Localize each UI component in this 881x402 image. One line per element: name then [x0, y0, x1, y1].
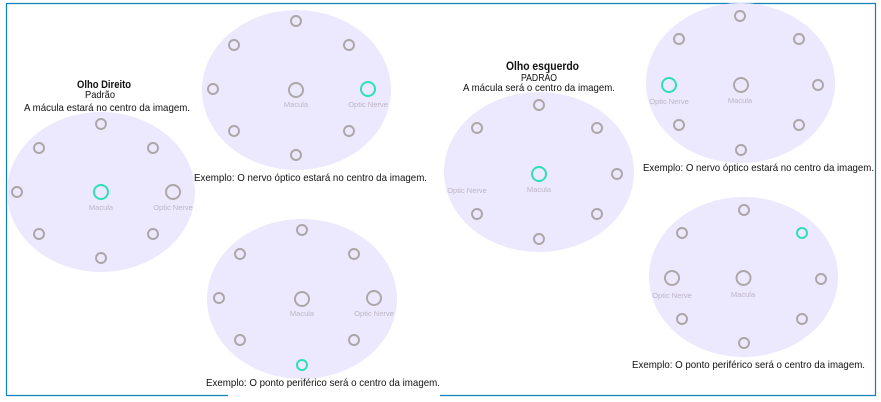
panel: right eye standard: [7, 79, 195, 272]
left eye optic nerve fundus diagram: [646, 3, 835, 163]
panel: left eye standard: [444, 59, 634, 252]
right eye peripheral fundus diagram: Macula: [290, 309, 315, 318]
left eye peripheral fundus diagram: [649, 197, 838, 357]
left eye standard fundus diagram: Optic Nerve: [447, 186, 487, 195]
right eye heading: A mácula estará no centro da imagem.: [24, 102, 190, 114]
right eye heading: Padrão: [85, 89, 115, 101]
right eye optic nerve caption: Exemplo: O nervo óptico estará no centro da imagem.: [194, 172, 427, 184]
panel: right eye peripheral example: [206, 219, 440, 389]
panel: left eye peripheral example: [632, 197, 865, 371]
right eye heading: Olho Direito: [77, 79, 131, 91]
panel: left eye optic nerve example: [643, 3, 874, 174]
left eye heading: PADRÃO: [521, 71, 557, 84]
left eye peripheral fundus diagram: Optic Nerve: [652, 291, 692, 300]
right eye optic nerve fundus diagram: Optic Nerve: [348, 100, 388, 109]
left eye optic nerve fundus diagram: Optic Nerve: [649, 97, 689, 106]
right eye optic nerve fundus diagram: Macula: [284, 100, 309, 109]
left eye heading: A mácula será o centro da imagem.: [463, 82, 615, 94]
right eye standard fundus diagram: Optic Nerve: [153, 203, 193, 212]
left eye peripheral caption: Exemplo: O ponto periférico será o centro da imagem.: [632, 359, 865, 371]
right eye heading: [24, 79, 190, 114]
left eye optic nerve fundus diagram: Macula: [728, 96, 753, 105]
right eye peripheral fundus diagram: Optic Nerve: [354, 309, 394, 318]
left eye heading: [463, 59, 615, 94]
right eye optic nerve fundus diagram: [202, 10, 391, 170]
right eye standard fundus diagram: Macula: [89, 203, 114, 212]
right eye peripheral caption: Exemplo: O ponto periférico será o centro da imagem.: [206, 377, 440, 389]
left eye standard fundus diagram: Macula: [527, 185, 552, 194]
right eye standard fundus diagram: [7, 112, 195, 272]
left eye heading: Olho esquerdo: [506, 59, 579, 73]
left eye standard fundus diagram: [444, 92, 634, 252]
right eye peripheral fundus diagram: [207, 219, 397, 379]
panel: right eye optic nerve example: [194, 10, 427, 184]
left eye peripheral fundus diagram: Macula: [731, 290, 756, 299]
